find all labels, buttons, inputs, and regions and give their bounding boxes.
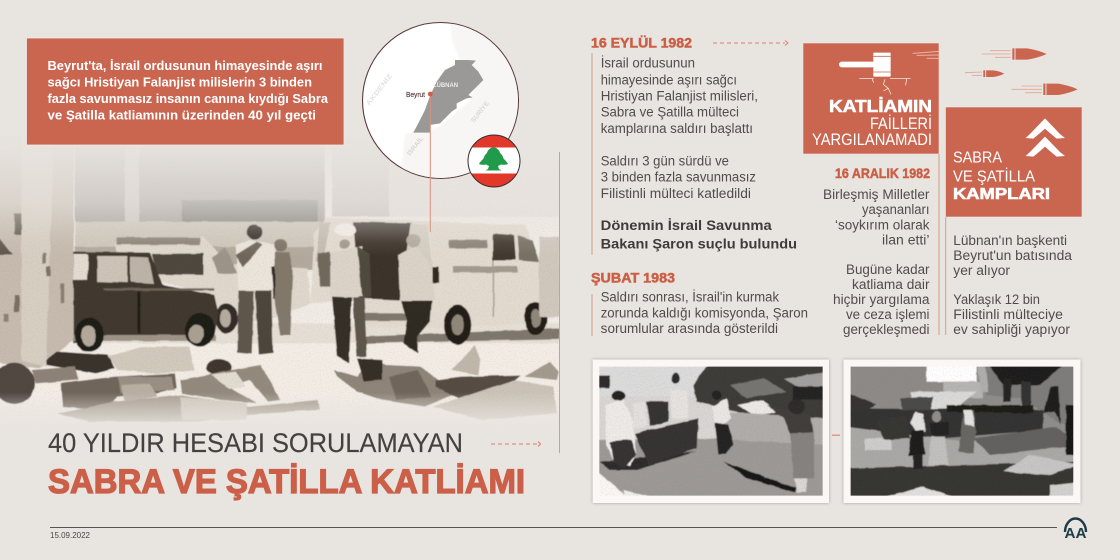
icon: AA logo: AA [1064,526,1087,542]
panel: perpetrators not tried [803,43,939,154]
timeline: 16 Eylül 1982: Dönemin İsrail Savunma [601,217,772,233]
map of Lebanon: LÜBNAN [433,80,458,89]
timeline: 16 Aralık 1982: 16 ARALIK 1982 [835,165,930,181]
panel: camps: VE ŞATİLLA [953,167,1035,186]
text: camps description: yer alıyor [953,263,1010,278]
panel: perpetrators not tried: KATLİAMIN [829,96,932,116]
timeline: 16 Eylül 1982: Sabra ve Şatilla mülteci [601,105,739,120]
title: SABRA VE ŞATİLLA KATLİAMI [48,463,525,501]
timeline: 16 Aralık 1982: yaşananları [862,202,930,217]
timeline: 16 Eylül 1982: Hristiyan Falanjist milisleri, [601,88,758,103]
arrow: dashed title arrow [491,442,540,446]
photo: stretcher carried through rubble [593,360,830,503]
footer rule [50,527,1057,528]
location pointer line to photo [428,92,433,232]
timeline: Şubat 1983 [591,270,808,336]
text: camps description: Filistinli mülteciye [953,307,1063,322]
timeline: Şubat 1983: Saldırı sonrası, İsrail'in kurmak [601,290,779,305]
icon: tents [1026,118,1065,157]
panel: intro callout [26,38,344,145]
timeline: 16 Eylül 1982: Bakanı Şaron suçlu bulundu [601,236,797,252]
panel: intro callout: fazla savunmasız insanın canına kıydığı Sabra [48,91,329,106]
icon: gavel [839,51,939,94]
connector tick between photos [832,434,840,436]
timeline: Şubat 1983: zorunda kaldığı komisyonda, Şaron [601,306,808,320]
panel: camps: KAMPLARI [953,186,1050,203]
timeline: 16 Eylül 1982: 16 EYLÜL 1982 [591,34,692,50]
main photo: street with car, van and victims [0,158,559,422]
text: camps description: Yaklaşık 12 bin [953,292,1040,307]
timeline: 16 Aralık 1982 [823,154,939,337]
date: 15.09.2022 [50,530,90,540]
timeline: 16 Aralık 1982: katliama dair [852,277,930,292]
timeline: 16 Eylül 1982: himayesinde aşırı sağcı [601,72,737,87]
panel: intro callout: ve Şatilla katliamının üzerinden 40 yıl geçti [48,108,316,122]
photo: women standing among the dead [844,360,1080,503]
text: camps description [946,217,1073,337]
panel: camps [946,107,1082,217]
text: camps description: Beyrut'un batısında [953,248,1073,263]
panel: intro callout: Beyrut'ta, İsrail ordusunun himayesinde aşırı [48,58,322,73]
map of Lebanon: İSRAİL [405,135,425,157]
text: camps description: Lübnan'ın başkenti [953,233,1067,248]
panel: camps: SABRA [953,150,1002,167]
timeline: Şubat 1983: ŞUBAT 1983 [591,270,675,286]
timeline: 16 Aralık 1982: ‘soykırım olarak [835,217,930,232]
timeline: 16 Aralık 1982: hiçbir yargılama [833,292,930,307]
timeline: 16 Aralık 1982: Birleşmiş Milletler [823,187,930,202]
timeline: 16 Eylül 1982: Filistinli mülteci katledildi [601,186,751,201]
text: camps description: ev sahipliği yapıyor [953,322,1071,337]
timeline: 16 Eylül 1982 [591,34,797,255]
timeline: Şubat 1983: sorumlular arasında gösterildi [601,321,778,336]
panel: intro callout: sağcı Hristiyan Falanjist milislerin 3 binden [48,74,312,90]
map of Lebanon: SURİYE [469,99,491,124]
timeline: 16 Aralık 1982: gerçekleşmedi [843,322,930,337]
timeline: 16 Eylül 1982: İsrail ordusunun [601,56,695,71]
timeline: 16 Aralık 1982: Bugüne kadar [846,262,930,277]
panel: perpetrators not tried: FAİLLERİ [870,114,932,133]
map of Lebanon [362,20,520,180]
timeline: 16 Eylül 1982: Saldırı 3 gün sürdü ve [601,154,729,168]
map of Lebanon: AKDENİZ [364,72,394,107]
timeline: 16 Aralık 1982: ve ceza işlemi [846,307,930,322]
timeline: 16 Eylül 1982: 3 binden fazla savunmasız [601,170,756,185]
icon: flying bullets [965,48,1078,95]
icon: AA logo [1064,518,1087,542]
icon: Lebanese flag [465,134,523,188]
timeline: 16 Eylül 1982: kamplarına saldırı başlattı [601,121,753,136]
timeline: 16 Aralık 1982: ilan etti’ [882,232,930,247]
heading: subtitle: 40 YILDIR HESABI SORULAMAYAN [48,428,463,458]
map of Lebanon: Beyrut [406,92,425,99]
decorative vertical rule beside photo [558,152,560,453]
panel: perpetrators not tried: YARGILANAMADI [812,131,932,149]
